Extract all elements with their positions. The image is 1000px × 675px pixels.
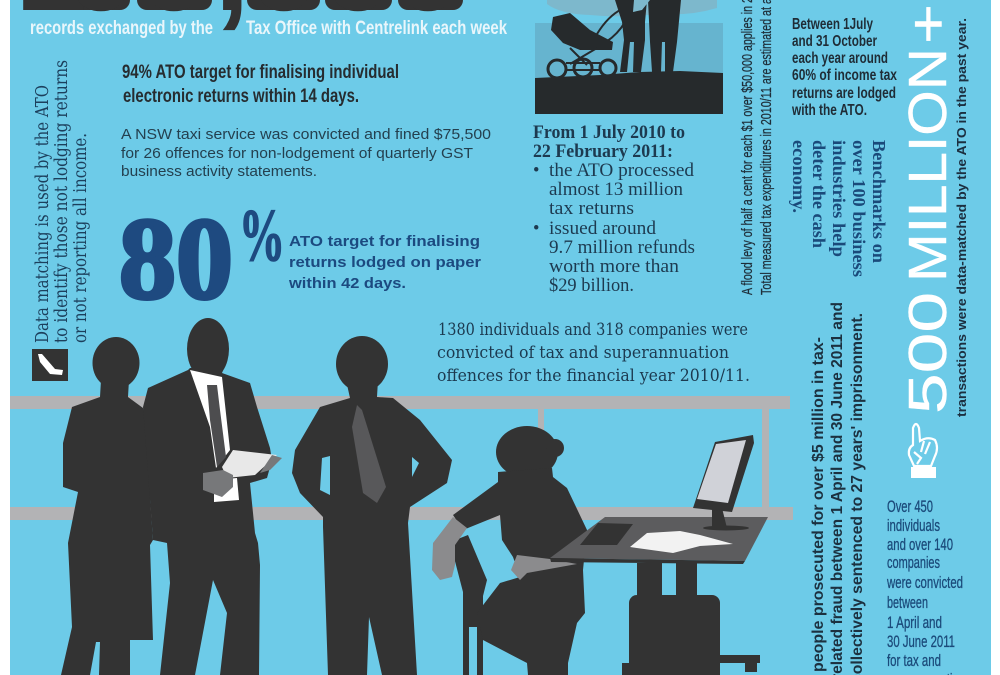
vertical text: flood levy [739, 0, 775, 295]
text: over 450 individuals: 30 June 2011 [887, 632, 955, 651]
vertical text: benchmarks: Benchmarks on [869, 140, 889, 263]
text: over 450 individuals [886, 497, 965, 675]
icon: tick box [32, 349, 68, 381]
text: between 1 July: returns are lodged [792, 85, 896, 102]
text: from 1 July 2010: the ATO processed [549, 161, 695, 181]
figure: seated woman [432, 426, 587, 675]
text: 1380 individuals: 1380 individuals and 318 companies were [438, 320, 748, 340]
subheading: records exchanged: Tax Office with Centrelink each week [246, 18, 507, 39]
vertical text: data matching: or not reporting all income. [71, 133, 91, 343]
text: between 1 July: with the ATO. [791, 102, 867, 119]
vertical text: people prosecuted: people prosecuted for over $5 million in tax- [810, 337, 827, 672]
text: between 1 July: and 31 October [792, 33, 877, 50]
icon: pointing hand [909, 424, 937, 478]
text: over 450 individuals: were convicted [886, 573, 963, 592]
vertical text: benchmarks: over 100 business [849, 140, 869, 277]
vertical text: people prosecuted: related fraud between 1 April and 30 June 2011 and [829, 302, 846, 675]
vertical text: data matching: to identify those not lodging returns [52, 60, 72, 343]
subheading: records exchanged [30, 18, 507, 39]
vertical text: data matching [33, 60, 91, 343]
text: over 450 individuals: and over 140 [887, 535, 953, 554]
stat: 80 percent: % [239, 195, 285, 277]
vertical text: people prosecuted: collectively sentenced to 27 years' imprisonment. [849, 313, 866, 675]
photo: family with stroller [535, 0, 723, 114]
vertical text: people prosecuted [810, 302, 866, 675]
text: NSW taxi service: business activity statements. [121, 163, 317, 180]
text: from 1 July 2010: $29 billion. [549, 276, 634, 296]
desk with computer [550, 435, 768, 675]
text: NSW taxi service: A NSW taxi service was convicted and fined $75,500 [121, 126, 491, 143]
text: NSW taxi service: for 26 offences for non-lodgement of quarterly GST [121, 145, 473, 162]
vertical text: benchmarks: deter the cash [809, 140, 829, 248]
text: 94 percent target [122, 62, 399, 107]
text: between 1 July: 60% of income tax [792, 67, 897, 84]
vertical text: data matching: Data matching is used by the ATO [33, 85, 53, 343]
text: 94 percent target: 94% ATO target for finalising individual [122, 62, 399, 83]
figure: woman standing [61, 337, 155, 675]
text: 80 percent target: ATO target for finalising [289, 233, 480, 250]
text: 80 percent target: within 42 days. [288, 275, 406, 292]
text: from 1 July 2010: issued around [549, 219, 657, 239]
vertical text: transactions: transactions were data-matched by the ATO in the past year. [954, 18, 969, 417]
text: over 450 individuals: companies [887, 553, 940, 572]
text: between 1 July: Between 1July [792, 16, 873, 33]
stat: 500 million: 500 [898, 292, 958, 414]
text: from 1 July 2010 [533, 123, 695, 296]
figure: man with hands on hips [292, 336, 452, 675]
text: over 450 individuals: for tax and [887, 651, 941, 670]
vertical text: benchmarks: economy. [789, 140, 809, 213]
text: over 450 individuals: 1 April and [887, 613, 942, 632]
text: between 1 July [791, 16, 897, 119]
text: from 1 July 2010: • [533, 161, 539, 181]
text: from 1 July 2010: From 1 July 2010 to [533, 123, 685, 143]
stat: 500 million [898, 4, 958, 414]
text: 80 percent target [288, 233, 481, 292]
text: from 1 July 2010: almost 13 million [549, 180, 683, 200]
vertical text: benchmarks [789, 140, 889, 277]
text: over 450 individuals: Over 450 [887, 497, 933, 516]
text: 1380 individuals: offences for the financial year 2010/11. [437, 366, 750, 386]
text: over 450 individuals: individuals [887, 516, 940, 535]
stat: 500 million: + [898, 4, 958, 44]
text: from 1 July 2010: 22 February 2011: [533, 142, 673, 162]
stat: 80 percent: 80 [119, 195, 233, 324]
stat: 500 million: MILLION [898, 48, 958, 282]
text: from 1 July 2010: tax returns [549, 199, 634, 219]
monitor [693, 435, 754, 530]
text: from 1 July 2010: worth more than [549, 257, 679, 277]
text: 80 percent target: returns lodged on paper [289, 254, 481, 271]
text: from 1 July 2010: 9.7 million refunds [549, 238, 695, 258]
text: over 450 individuals: between [887, 593, 928, 612]
text: NSW taxi service [121, 126, 491, 180]
text: between 1 July: each year around [792, 50, 888, 67]
text: 94 percent target: electronic returns within 14 days. [123, 86, 359, 107]
text: 1380 individuals: convicted of tax and superannuation [437, 343, 729, 363]
railing [10, 396, 793, 520]
vertical text: benchmarks: industries help [829, 140, 849, 257]
text: from 1 July 2010: • [533, 219, 539, 239]
subheading: records exchanged: records exchanged by the [30, 18, 213, 39]
figure: man with papers [143, 318, 282, 675]
text: 1380 individuals [437, 320, 750, 386]
